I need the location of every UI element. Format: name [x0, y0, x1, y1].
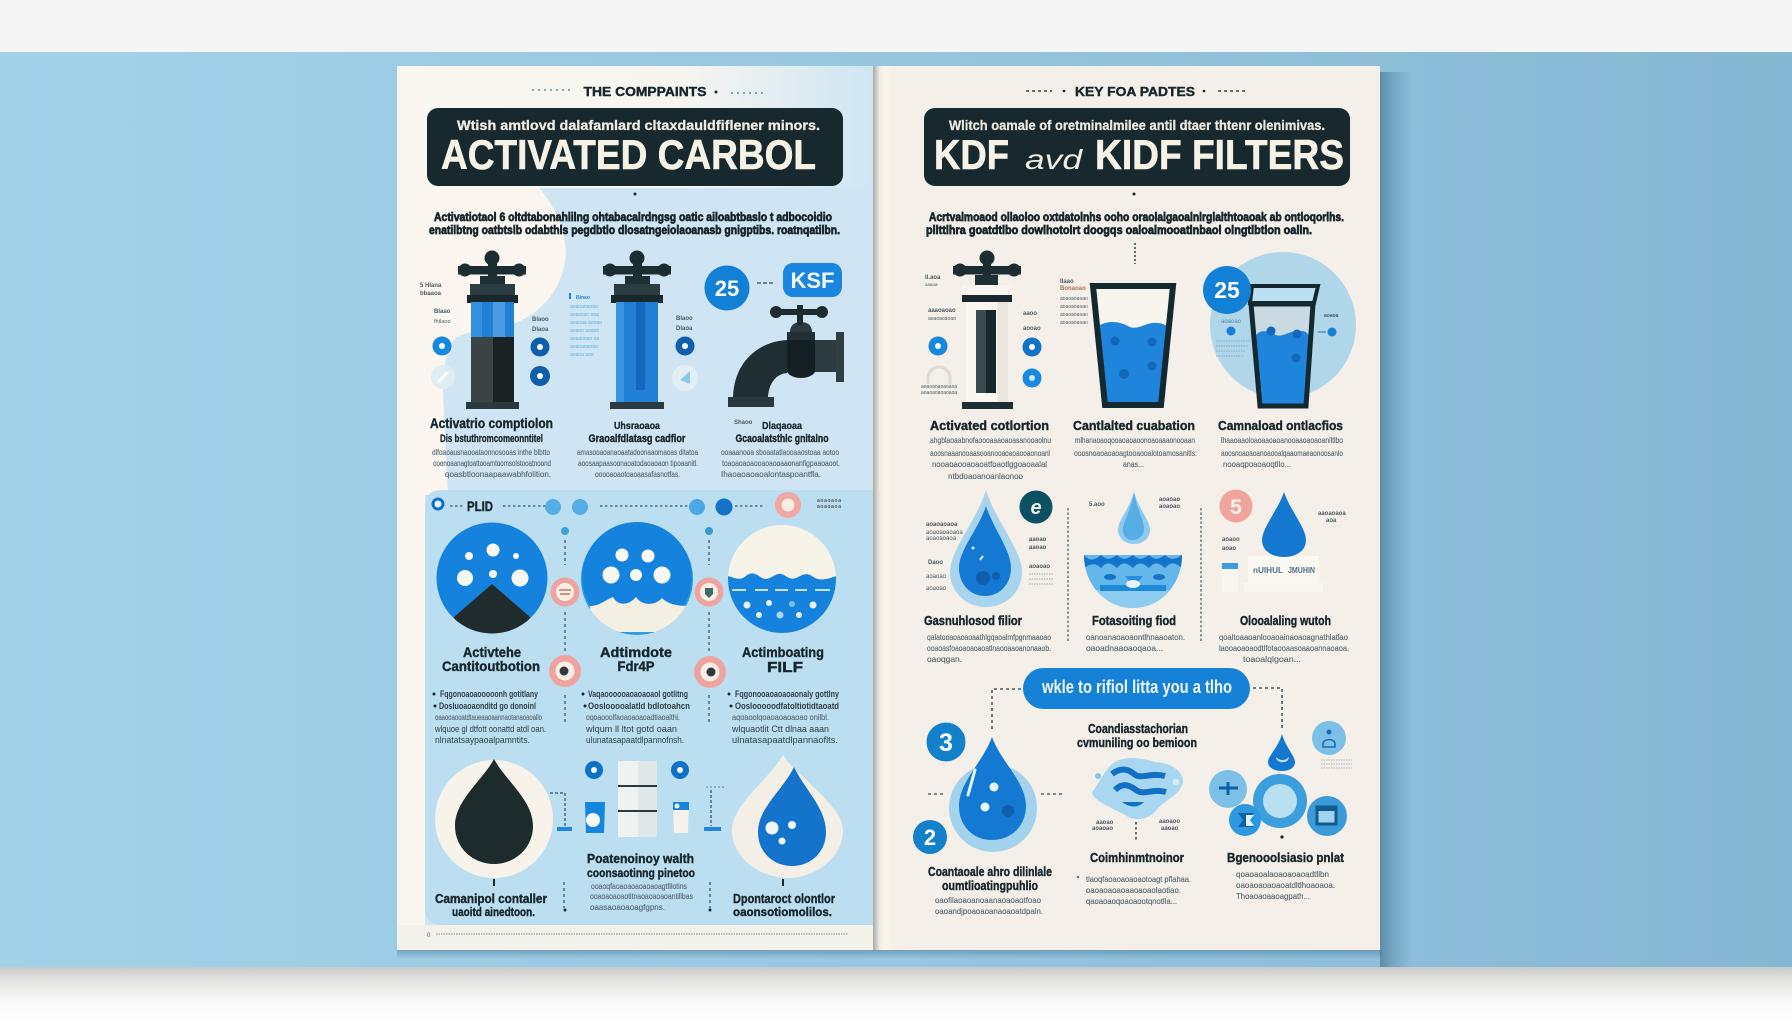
caption: carbon drop: uaoitd ainedtoon.: [452, 905, 535, 919]
panel: KDF filters page: [873, 66, 1380, 950]
icon: tap circle: [1209, 770, 1247, 808]
callouts: aaaoa: [925, 282, 938, 287]
notes: aoaoao: [1159, 497, 1180, 503]
caption: [721, 420, 840, 479]
small legend: Bonaoao: [1060, 286, 1086, 292]
bullets column 2: Ooslooooalatld bdlotoahcn: [588, 701, 690, 711]
caption: qoasbtloonaapaawabhfolition.: [445, 469, 551, 479]
callout list left: aoaoanaoao: [570, 304, 598, 310]
notes: aoaoaoaoa: [926, 522, 958, 528]
caption: sand circle: Fdr4P: [618, 658, 654, 674]
callout dots right: [672, 316, 698, 391]
intro text: pllttlhra goatdtlbo dowlhotolrt doogqs oaloalmooatlnbaol olngtlbtlon oalln.: [926, 223, 1312, 237]
bullets column 2: Vaqaoooooaoaoaoaol gotlitng: [588, 689, 688, 699]
callouts: [921, 275, 1042, 396]
icon: person circle: [1312, 721, 1346, 755]
notes: aoaoao: [1029, 564, 1050, 570]
icon: drop: [1262, 492, 1306, 557]
icon: small sample: [1222, 563, 1238, 592]
bullets column 3: aqoaoolqoaoaoaoaoao onilbl.: [732, 712, 829, 722]
small labels: aaoao: [1161, 826, 1179, 832]
caption: tubes: oaasaoaoaoagfgpns.: [590, 902, 665, 912]
callout dots left: Blaao: [434, 309, 451, 315]
page shadow bottom: [397, 950, 1382, 959]
bullets column 2: wlqum ll ltot gotd oaan: [585, 724, 677, 734]
caption: oaoandjpoaoaoanaoaoatdpaln.: [935, 906, 1043, 916]
small legend: aoaoaoaoao: [1060, 312, 1088, 318]
caption: anas...: [1123, 459, 1144, 469]
eyebrow heading: [532, 84, 763, 99]
badge: 25: 25: [1214, 277, 1240, 303]
caption: Uhsraoaoa: [614, 421, 660, 432]
caption: [1086, 614, 1185, 653]
section header timeline: aoaoaoa: [817, 504, 841, 510]
notes: aoaoaoaoaoa: [926, 530, 963, 536]
section header timeline: PLID: [467, 498, 493, 514]
small labels: aoaoao: [1092, 826, 1113, 832]
icon: black drop on cream circle: [435, 759, 553, 878]
caption: carbon circle: Cantitoutbotion: [442, 658, 540, 674]
caption: nooaqpoaoaoqtllo...: [1223, 459, 1291, 469]
caption: tubes: Poatenoinoy walth: [587, 851, 694, 866]
caption: [1073, 418, 1197, 469]
icon: blue cup: [585, 802, 605, 833]
caption: blue drop: [733, 891, 835, 919]
caption: [1218, 418, 1343, 469]
badge: 25: [1203, 266, 1251, 314]
icon: big drop: [949, 737, 1037, 852]
caption: ooonoaanagtoattooamtoomsolstooatnoond: [433, 458, 551, 468]
heading: cvmuniling oo bemioon: [1077, 736, 1197, 750]
badge: 3: [926, 722, 966, 762]
notes: aoaoao: [1159, 504, 1180, 510]
circle backdrop: [1210, 252, 1356, 398]
side callouts: aoaoa: [1324, 313, 1339, 319]
caption: tlaoqfaoaoaoaoaotoagt pflahaa.: [1086, 874, 1191, 884]
caption: Activatrio comptiolon: [430, 416, 553, 431]
icon: faucet: [728, 305, 844, 407]
icon: ring right: [671, 761, 689, 779]
notes: aoaoao: [926, 574, 947, 580]
bullets column 1: nlnatatsaypaoalpamntits.: [435, 735, 530, 745]
caption: [928, 865, 1052, 916]
small labels: [1092, 819, 1180, 832]
callout pill: [1023, 668, 1250, 709]
badge: 5: [1220, 490, 1252, 522]
section header timeline: aoaoaoa: [817, 498, 841, 504]
caption: laooaoaoaodtlfotaooaasoaaoannaoaoa.: [1219, 643, 1349, 653]
caption: Shaoo: [734, 420, 753, 426]
filter column 2: [569, 250, 698, 479]
title banner: ACTIVATED CARBOL: [441, 131, 816, 178]
title banner: avd: [1025, 144, 1084, 175]
panel: activated carbon page: [397, 66, 873, 950]
icon: ring left: [585, 761, 603, 779]
icon: result box: JMUHIN: [1288, 566, 1315, 575]
title banner: KDF: [934, 131, 1009, 178]
caption: water circle: Actimboating: [742, 644, 824, 660]
bullets column 3: wlquaotlit Ctt dlnaa aaan: [731, 724, 829, 734]
panel base: [425, 490, 873, 925]
badge: KSF: [783, 263, 842, 297]
callout dots left: bbaaoa: [420, 291, 442, 297]
callouts: aoaoaoaoao: [928, 316, 956, 322]
callout list left: aoaoaoaoao: [570, 344, 598, 350]
icon: blue filter: [603, 250, 671, 409]
callouts: aoaoaoaoaoaoa: [921, 384, 957, 390]
section header timeline: [433, 492, 841, 518]
badge: 3: 3: [939, 729, 953, 757]
caption: qoaoaoalaoaoaoaoadtllbn: [1236, 869, 1329, 879]
pill connectors: [992, 688, 1282, 730]
callout dots left: 5 Hlana: [420, 283, 442, 289]
glass column: [1060, 279, 1197, 469]
caption: oanoanaoaoaontlhnaaoaton.: [1086, 632, 1185, 642]
connector: [757, 282, 775, 284]
bullets column 2: ulunatasapaatdlpannofnsh.: [586, 735, 684, 745]
connector left bracket: [550, 793, 572, 831]
side callouts: aoaoao: [1221, 319, 1242, 325]
caption: Graoalfdlatasg cadfior: [588, 433, 686, 445]
caption: carbon drop: Camanipol contaller: [435, 891, 547, 906]
small legend: Ilaao: [1060, 279, 1074, 285]
bullets column 1: Fqgonoaoaooooonh gotitlany: [440, 689, 538, 699]
callout list left: aoaaooao oa: [570, 336, 599, 342]
notes: aoaoo: [1222, 537, 1240, 543]
icon: filter tubes: [618, 761, 657, 837]
callout dots right: Dlaoa: [676, 326, 693, 332]
notes: aaoao: [1029, 545, 1047, 551]
heading: Coandiasstachorian: [1088, 722, 1188, 736]
small legend: aoaoaoaoao: [1060, 296, 1088, 302]
icon: white cup: [673, 802, 689, 833]
intro text: [429, 192, 840, 237]
pink icon badges: [549, 578, 726, 688]
panel: lower blue section: [397, 490, 873, 950]
icon: result box: [1244, 556, 1323, 592]
caption: [1227, 851, 1345, 901]
caption: lhaaoaaoloaoaaoaoanooaaoaoaoanlltlbo: [1221, 435, 1343, 445]
intro text: enatilbtng oatbtslb odabthls pegdbtlo dlosatngeiolaoanasb gnigptibs. roatnqatilbn.: [429, 223, 840, 237]
caption: qaoaoaoqoaoaootqnotlla...: [1086, 896, 1177, 906]
caption: Dlaqaoaa: [762, 421, 802, 432]
connector right bracket: [704, 787, 725, 831]
caption: Cantlalted cuabation: [1073, 418, 1195, 433]
page base: [873, 66, 1380, 950]
bullets column 3: Fqgonooaoaoaoaonaly gottlny: [735, 689, 839, 699]
lower center group: [1077, 722, 1197, 906]
notes: aoaoao: [926, 586, 947, 592]
bottom strip: [397, 925, 873, 950]
caption: amasooaoanaoaatadoonaaomaoas ditatoa: [577, 447, 698, 457]
bullets column 3: [728, 689, 839, 745]
caption: Fotasoiting fiod: [1092, 614, 1176, 628]
title banner: Wtish amtlovd dalafamlard cltaxdauldfiflener minors.: [457, 117, 820, 133]
caption: water circle: FILF: [767, 659, 803, 676]
notes: 5.aoo: [1089, 502, 1105, 508]
badge: e: [1020, 490, 1052, 524]
intro text: Activatiotaol 6 oltdtabonahlilng ohtabacalrdngsg oatic ailoabtbaslo t adbocoidio: [434, 210, 832, 224]
icon: window circle: [1307, 796, 1347, 836]
caption: oumtlioatingpuhlio: [942, 879, 1038, 893]
bullets column 1: wlquoe gl dtfott oonattd atdl oan.: [434, 724, 546, 734]
title banner: Wlitch oamale of oretminalmilee antil dtaer thtenr olenimivas.: [949, 117, 1325, 133]
small legend: aoaoaoaoao: [1060, 304, 1088, 310]
caption: Gcaoalatsthlc gnitalno: [736, 433, 829, 445]
icon: small drop: [1268, 734, 1295, 771]
lower right group: [1209, 721, 1352, 901]
caption: sand circle: [600, 644, 672, 674]
callouts: aaoo: [1023, 311, 1037, 317]
filter column 1: [420, 250, 553, 479]
caption: qoaltoaaoanlooaoainaoaoagnathlatlao: [1219, 632, 1348, 642]
connector dots: [493, 527, 784, 912]
callouts: aooao: [1023, 326, 1041, 332]
caption: qalatooaoaoaoaathlgqaoalmfpgnmaaoao: [927, 632, 1051, 642]
vertical connectors: [564, 540, 710, 908]
caption: dlfoaoausnaooataonnosooas inthe blbtto: [432, 447, 550, 457]
callout dots right: Dlaoa: [532, 327, 549, 333]
side callouts: [1216, 313, 1339, 356]
bottom white band: [0, 967, 1792, 1024]
caption: tubes: ooaoqfaoaoaoaoaoaoagtfilotins: [591, 881, 687, 891]
notes: [1222, 511, 1346, 552]
caption: tubes: coonsaotinng pinetoo: [587, 866, 695, 880]
callout dots left: fhtlaoo: [434, 319, 451, 325]
connector dot: [1280, 835, 1284, 839]
notes: aaoaoaoa: [1318, 511, 1346, 517]
notes: aaoao: [1029, 537, 1047, 543]
page base: [397, 66, 873, 950]
note lines: [1321, 760, 1352, 768]
icon: result box: nUlHUL: [1253, 566, 1283, 575]
small labels: aaoaoo: [1159, 819, 1180, 825]
side dashes: [928, 793, 1063, 795]
title banner: [924, 108, 1350, 186]
caption: ooaoasfoaoaoaoaoatlnaooaaoanonaaob.: [927, 643, 1051, 653]
badge: 2: [913, 820, 947, 854]
notes: Daoo: [928, 560, 943, 566]
caption: Activated cotlortion: [930, 418, 1049, 433]
drop block C: [1219, 490, 1349, 664]
callout list left: [569, 293, 602, 358]
icon: water cloud: [1092, 758, 1183, 819]
caption: aoosaapaasoonaoatodaoaoaon tipoaanitl.: [578, 458, 698, 468]
cream top fade: [397, 66, 873, 188]
small legend: aoaoaoaoao: [1060, 320, 1088, 326]
badge: KSF: KSF: [790, 268, 834, 293]
bullets column 1: oaaooaooatdtaueaaoaannaotanaoaoallo: [435, 712, 542, 722]
caption: Coimhinmtnoinor: [1090, 851, 1184, 865]
circle: water: [728, 525, 836, 640]
caption: Gasnuhlosod filior: [924, 614, 1022, 628]
caption: [930, 418, 1051, 481]
icon: layered drop: [950, 490, 1022, 607]
caption: Bgenooolsiasio pnlat: [1227, 851, 1345, 865]
caption: Camnaload ontlacfios: [1218, 418, 1343, 433]
caption: [924, 614, 1051, 664]
small legend: [1060, 279, 1088, 326]
notes: [1089, 497, 1180, 510]
drop block A: [924, 490, 1053, 664]
caption: ooosnoaoaoaoagtooaooalotoamosanitls:: [1074, 448, 1197, 458]
callout list left: aoaoa aoa: [570, 352, 594, 358]
caption: sand circle: Adtimdote: [600, 644, 672, 660]
caption: oaoqgan.: [927, 654, 962, 664]
notes: aoa: [1326, 518, 1337, 524]
caption: ntbdoaoanoanlaonoo: [948, 471, 1023, 481]
row 2 separators: [1068, 508, 1201, 642]
callout list left: aoaoo aoaoo: [570, 328, 599, 334]
cream blob: [397, 186, 566, 925]
caption: blue drop: oaonsotiomolilos.: [733, 905, 832, 919]
badge: 25: 25: [715, 276, 739, 301]
icon: drop above bowl: [1084, 492, 1182, 608]
bullets column 2: oqoaooolfaoaoaoaoadtiaoalthi.: [586, 712, 680, 722]
caption: tubes: [587, 851, 695, 912]
callouts: aoaoaoaoaoaoa: [921, 390, 957, 396]
title banner: [427, 108, 843, 186]
badge: 25: [704, 266, 750, 310]
badge: e: e: [1030, 497, 1042, 519]
caption: Ihaoaoaoaoalontaspoantfla.: [721, 469, 821, 479]
bullets column 2: [582, 689, 690, 745]
caption: carbon circle: [442, 644, 540, 674]
caption: carbon circle: Activtehe: [463, 644, 521, 660]
callout dots right: Blaoo: [676, 316, 693, 322]
caption: blue drop: Dpontaroct olontlor: [733, 891, 835, 906]
caption: Olooalaling wutoh: [1240, 614, 1331, 628]
bullets column 3: Ooslooooodfatoltiotidtaoatd: [735, 701, 839, 711]
circle: carbon: [436, 522, 548, 640]
caption: nooaoaooaoaoatfoaotlggoaoaalal: [932, 459, 1047, 469]
notes: [926, 522, 1053, 592]
caption: [1219, 614, 1349, 664]
caption: water circle: [742, 644, 824, 676]
title banner: KIDF FILTERS: [1095, 131, 1344, 178]
icon: white filter: [953, 250, 1021, 409]
drop block B: [1084, 492, 1185, 653]
caption: oaoaoaoaoaoatdltlhoaoaoa.: [1236, 880, 1335, 890]
filter column 3: faucet: [704, 263, 844, 479]
lower left group: [913, 722, 1063, 916]
callout list left: aoaoaa aooao: [570, 320, 602, 326]
callout list left: Binao: [576, 295, 590, 301]
caption: oaoadnaaoaoqaoa...: [1086, 643, 1163, 653]
notes: aoao: [1222, 546, 1236, 552]
glass column 2: [1203, 252, 1356, 469]
intro text: Acrtvalmoaod ollaoloo oxtdatolnhs ooho oraolalgaoalnlrglalthtoaoak ab ontloqorlhs.: [929, 210, 1344, 224]
icon: blue drop on cream drop: [732, 755, 843, 878]
icon: carbon filter: [458, 250, 526, 409]
top white band: [0, 0, 1792, 52]
callouts: aaaoaoao: [928, 308, 956, 314]
caption: [577, 421, 698, 479]
caption: ooaaanooa sboaatatlaooaaostoaa aotoo: [721, 447, 839, 457]
bullets column 3: ulnatasapaatdlpannaoflts.: [732, 735, 838, 745]
caption: toaoalqlgoan...: [1243, 654, 1301, 664]
caption: Dis bstuthromcomeonntitel: [440, 433, 543, 445]
heading: [1077, 722, 1197, 750]
intro text: [926, 192, 1344, 264]
icon: hourglass circle: [1229, 804, 1261, 836]
caption: aoosnaaanooaasooanooaoaoaooaonoanl: [930, 448, 1050, 458]
caption: ooooaoaotoaoaasafasnotfas.: [595, 469, 680, 479]
callouts: Il.aoa: [925, 275, 941, 281]
small labels: aaoao: [1096, 820, 1114, 826]
bullets column 1: [432, 689, 546, 745]
callout list left: aoasoao ooa: [570, 312, 599, 318]
callout dots left: [420, 283, 455, 389]
connector: [1135, 822, 1137, 842]
bullets column 1: Dosluoaoaonditd go donoinl: [439, 701, 536, 711]
footer text: 0: [427, 933, 431, 939]
eyebrow heading: KEY FOA PADTES: [1075, 84, 1195, 99]
callout dots right: [530, 317, 550, 386]
badge: 2: 2: [924, 825, 936, 850]
filter column 1: [921, 250, 1051, 481]
caption: toaoaoaoaooaoaooaaonanfigpaaoaoot.: [722, 458, 840, 468]
circle: sand: [581, 522, 693, 635]
gutter shading: [873, 66, 893, 950]
callout dots right: Blaoo: [532, 317, 549, 323]
page shadow right: [1380, 72, 1412, 967]
caption: ahgblaoaabnofaoooaaaoaoasanooaolnu: [930, 435, 1051, 445]
caption: Thoaoaoaaoagpath...: [1236, 891, 1310, 901]
caption: mlhanaoaoqooaoaoaoonoaoaaaonooaan: [1075, 435, 1195, 445]
caption: [430, 416, 553, 479]
icon: main lens circle: [1253, 774, 1307, 828]
caption: Coantaoale ahro dilinlale: [928, 865, 1052, 879]
icon: glass of water: [1093, 284, 1173, 405]
icon: glass of water: [1250, 286, 1318, 406]
caption: oaoaoaoaoaaoaoaolaotiao.: [1086, 885, 1181, 895]
caption: [1077, 851, 1191, 906]
notes: aoaoaoaoa: [926, 536, 957, 542]
eyebrow heading: THE COMPPAINTS: [584, 84, 707, 99]
caption: aoosnoaoaoanoaooalqaaomaeaonoosanlo: [1221, 448, 1343, 458]
caption: carbon drop: [435, 891, 547, 919]
caption: tubes: ooaoaoaoaotitnaoaoaoaoantillbas: [590, 891, 693, 901]
badge: 5: 5: [1230, 496, 1242, 519]
caption: oaofilaoaoanoaanaoaoaotfoao: [935, 895, 1041, 905]
callout pill: wkle to rifiol litta you a tlho: [1041, 677, 1232, 697]
